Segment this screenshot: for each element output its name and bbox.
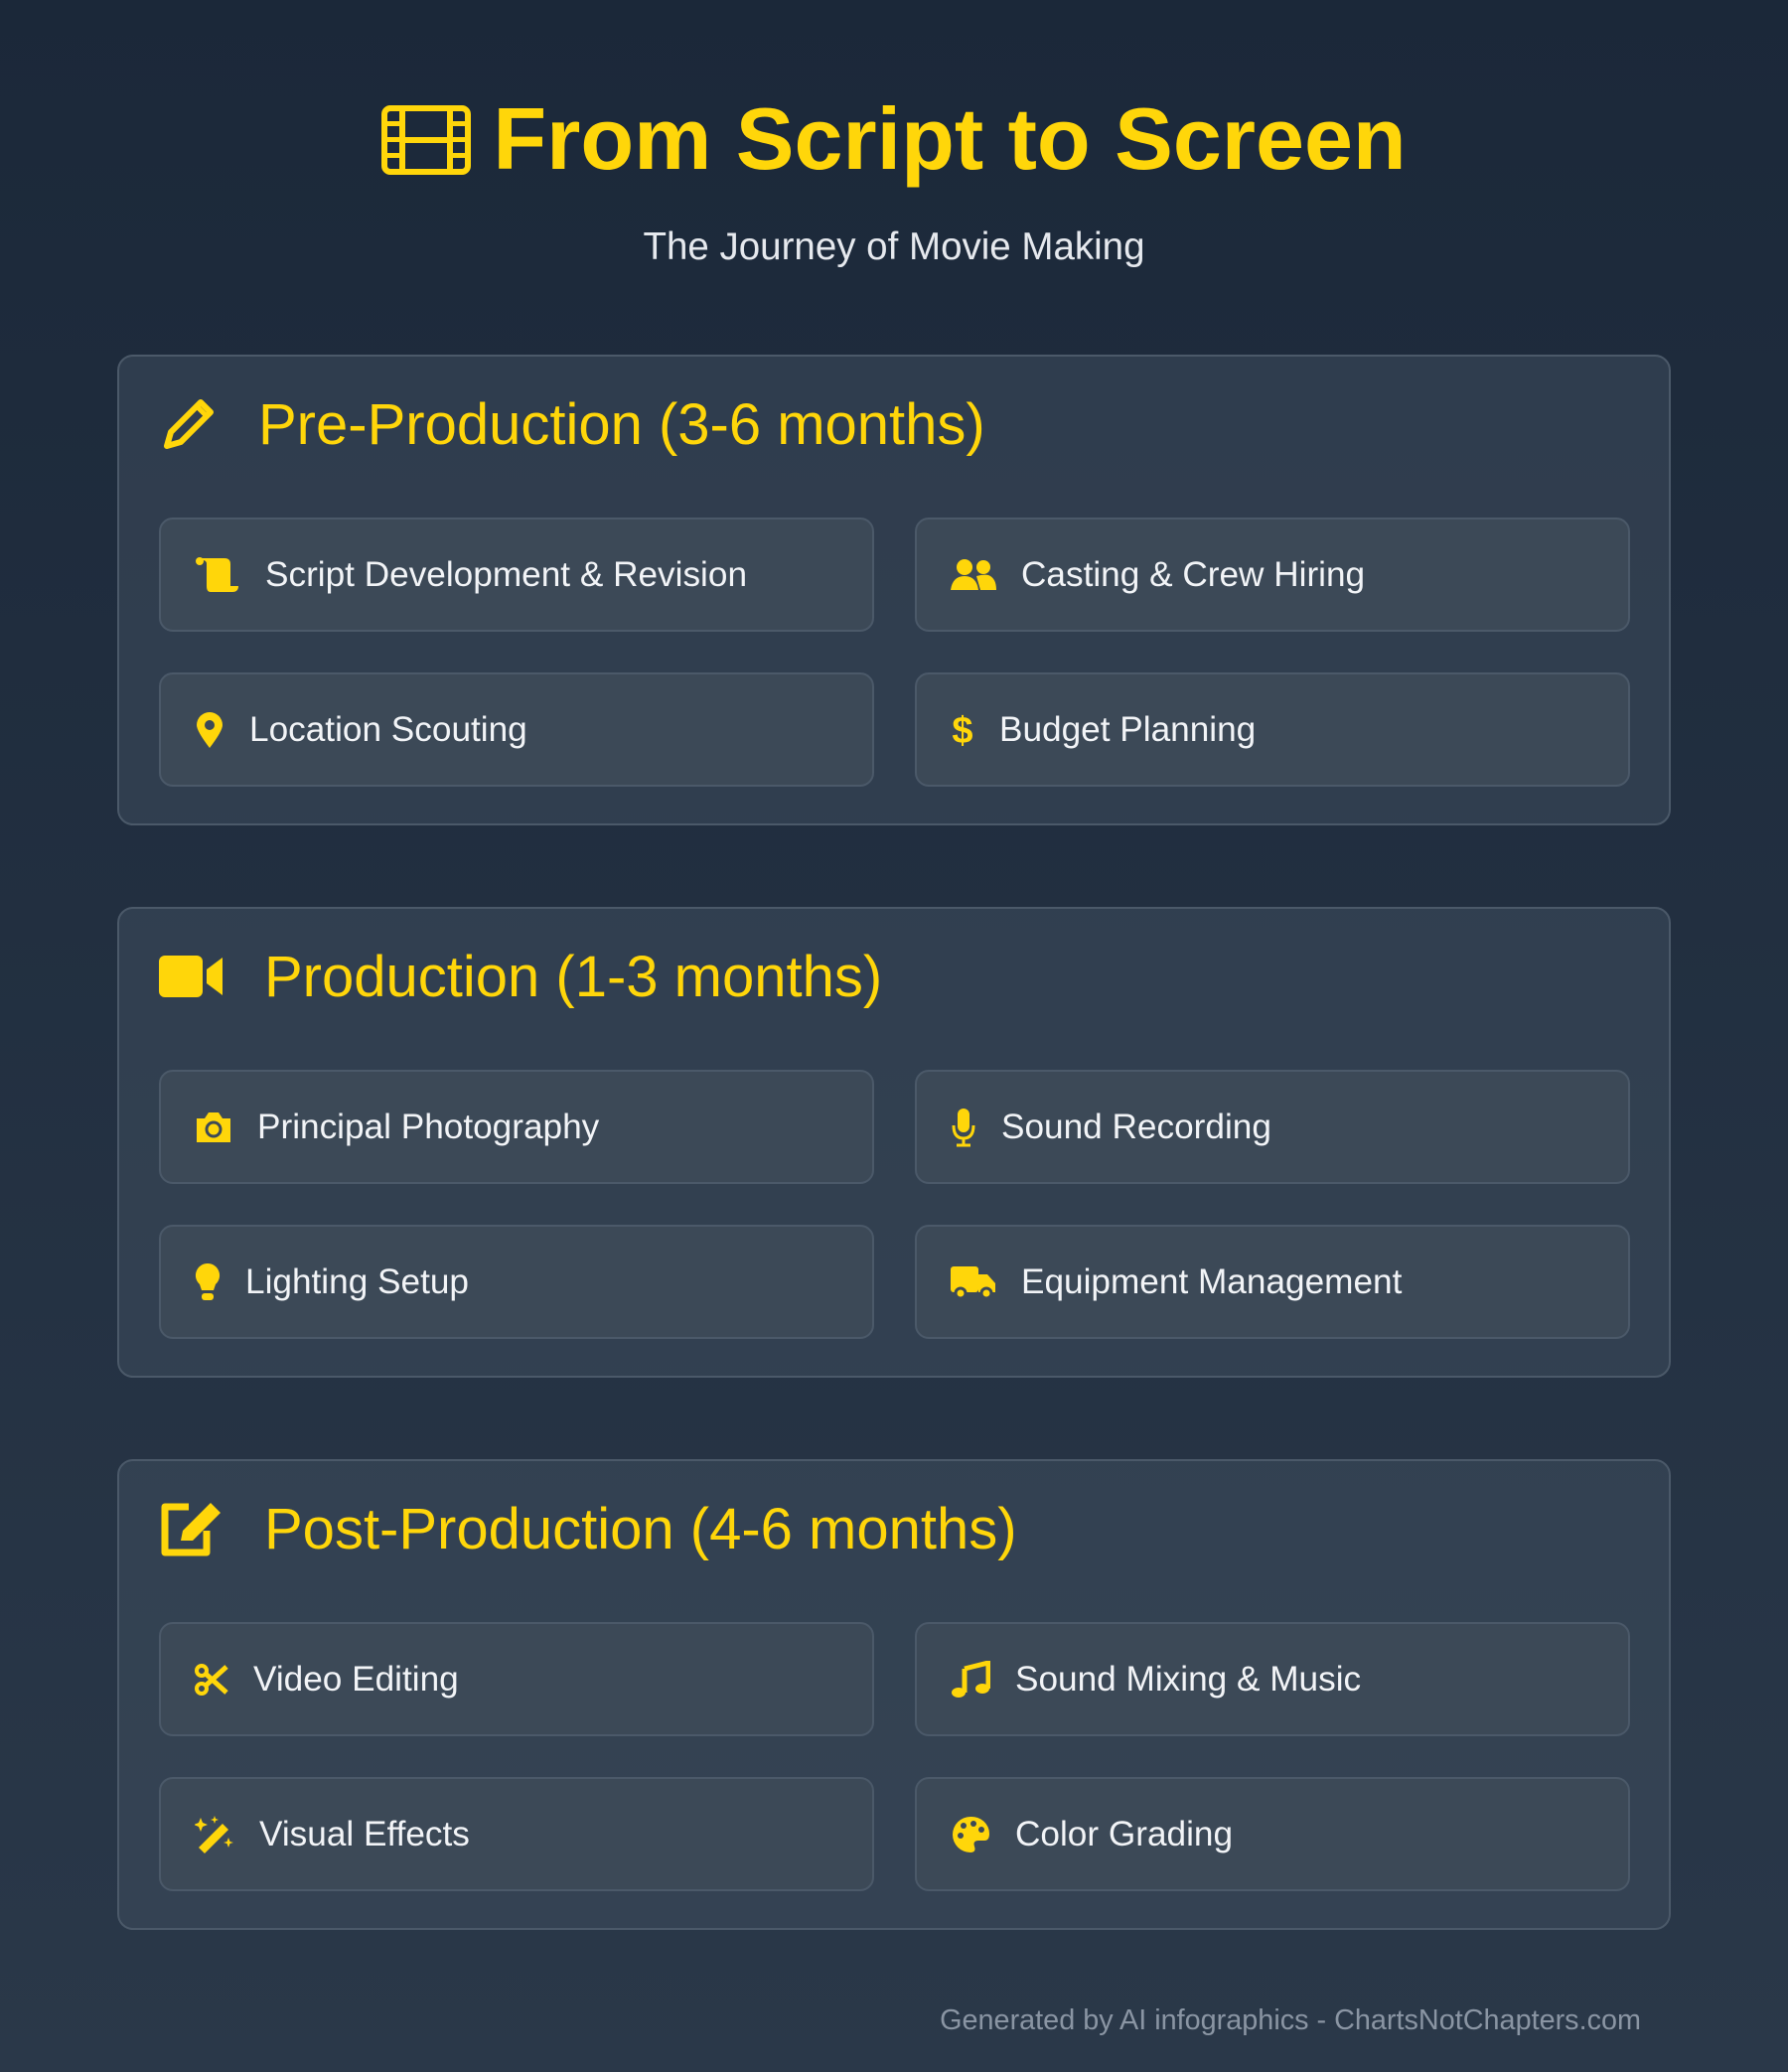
item: sound mixing: Sound Mixing & Music xyxy=(1015,1659,1361,1699)
item: photography xyxy=(159,1070,874,1184)
subtitle: The Journey of Movie Making xyxy=(643,225,1144,268)
item: lighting: Lighting Setup xyxy=(245,1261,469,1301)
item: casting: Casting & Crew Hiring xyxy=(1021,554,1365,594)
item: script: Script Development & Revision xyxy=(265,554,747,594)
item: casting xyxy=(915,518,1630,632)
item: visual effects xyxy=(159,1777,874,1891)
item: budget: Budget Planning xyxy=(999,709,1256,749)
panel: post-production xyxy=(117,1459,1671,1930)
panel: pre-production xyxy=(117,355,1671,825)
item: color grading: Color Grading xyxy=(1015,1814,1233,1853)
item: location xyxy=(159,672,874,787)
item: equipment xyxy=(915,1225,1630,1339)
item: script xyxy=(159,518,874,632)
item: lighting xyxy=(159,1225,874,1339)
heading: production: Production (1-3 months) xyxy=(264,944,882,1009)
item: video editing xyxy=(159,1622,874,1736)
item: photography: Principal Photography xyxy=(257,1107,599,1146)
item: sound recording xyxy=(915,1070,1630,1184)
heading: pre-production: Pre-Production (3-6 months) xyxy=(258,391,985,457)
heading: post-production: Post-Production (4-6 months) xyxy=(264,1496,1017,1561)
item: color grading xyxy=(915,1777,1630,1891)
item: video editing: Video Editing xyxy=(253,1659,459,1699)
title: From Script to Screen xyxy=(493,89,1407,188)
footer: Generated by AI infographics - ChartsNotChapters.com xyxy=(940,2004,1641,2036)
item: budget xyxy=(915,672,1630,787)
panel: production xyxy=(117,907,1671,1378)
item: equipment: Equipment Management xyxy=(1021,1261,1402,1301)
item: sound mixing xyxy=(915,1622,1630,1736)
item: location: Location Scouting xyxy=(249,709,527,749)
item: visual effects: Visual Effects xyxy=(259,1814,470,1853)
item: sound recording: Sound Recording xyxy=(1001,1107,1271,1146)
